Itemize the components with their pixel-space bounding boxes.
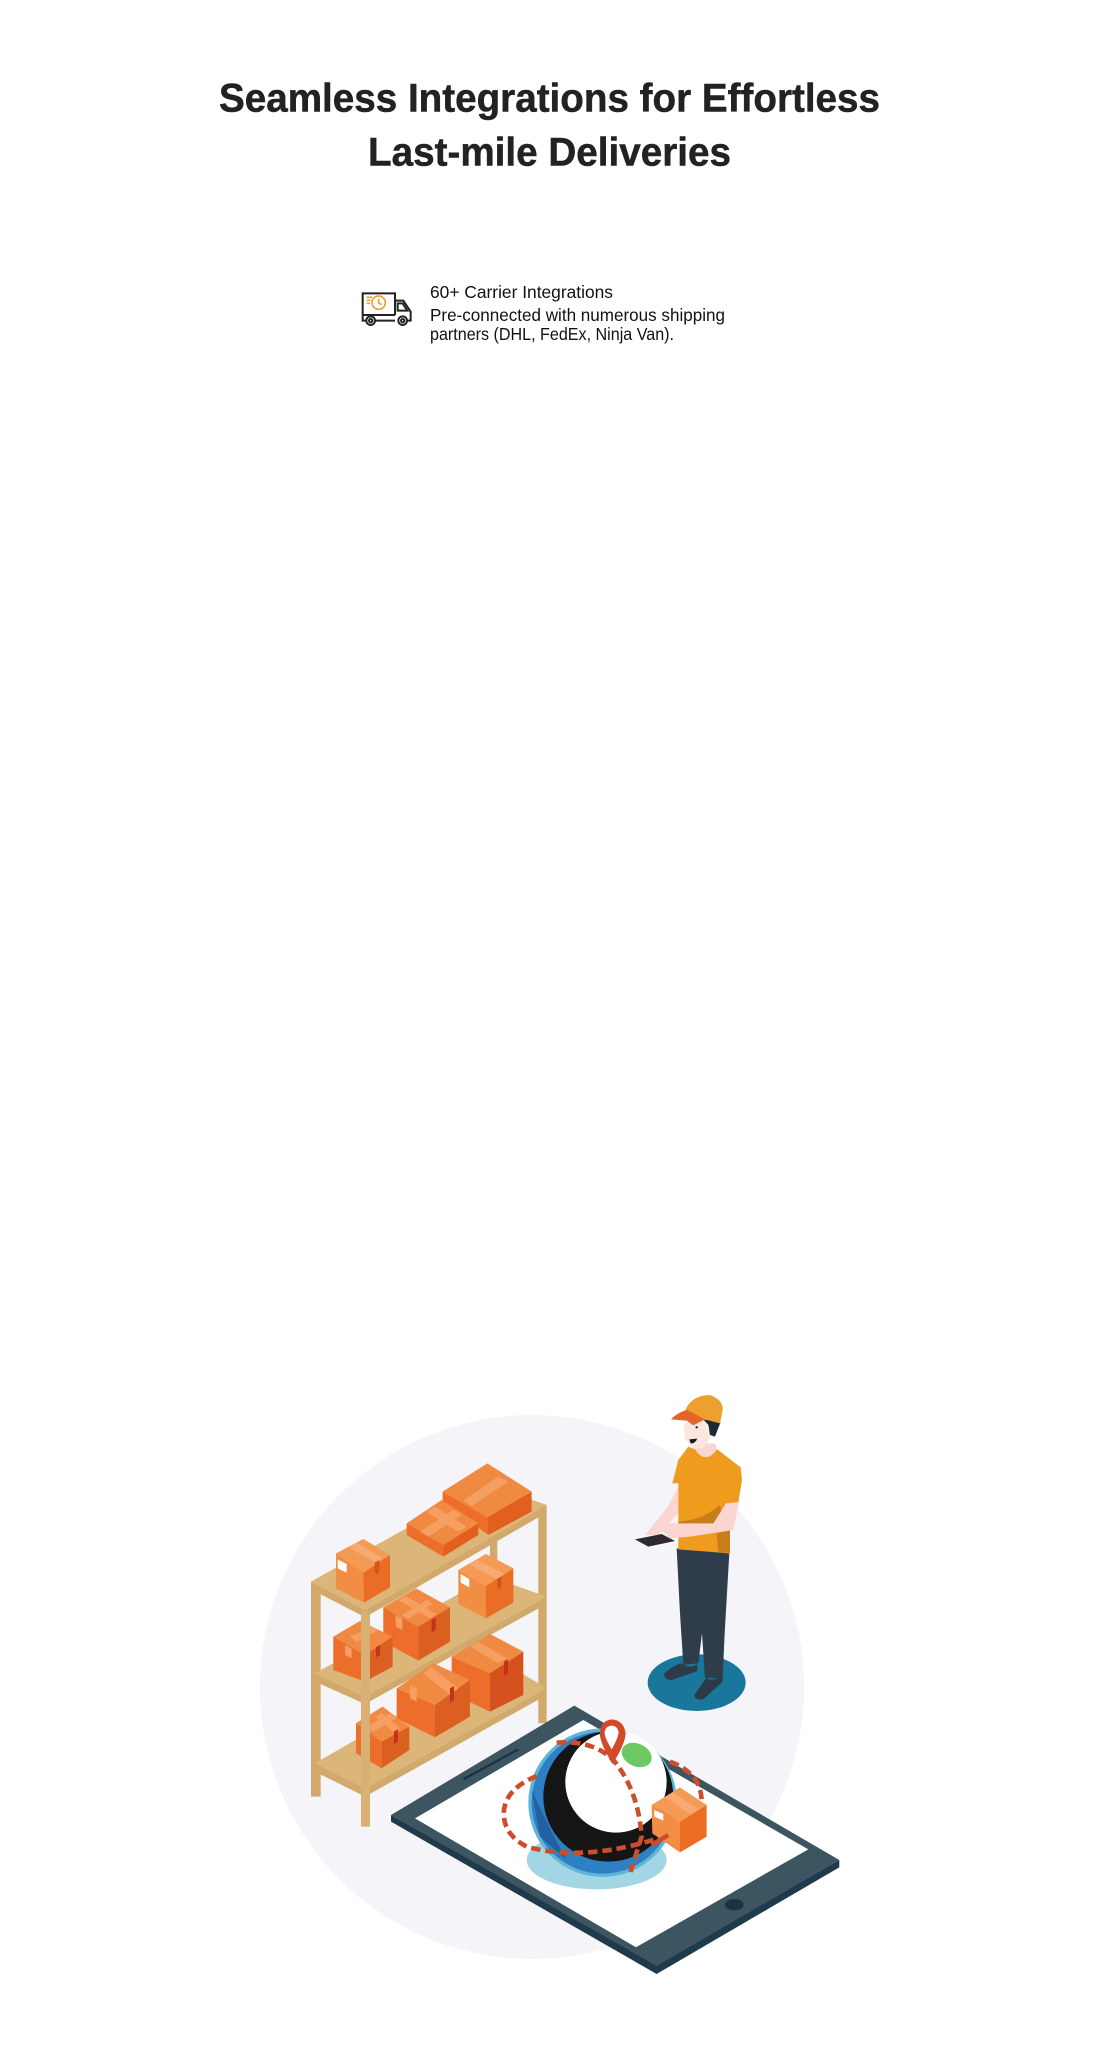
text block: carrier integrations: 60+ Carrier Integrations (430, 282, 613, 302)
left post (311, 1583, 321, 1797)
shoes (664, 1663, 723, 1700)
near arm (660, 1502, 739, 1538)
title: Seamless Integrations for Effortless (219, 76, 880, 120)
title: Last-mile Deliveries (368, 130, 731, 174)
globe shadow (527, 1831, 667, 1889)
box (356, 1707, 409, 1768)
parcel box (652, 1787, 707, 1852)
middle shelf (315, 1577, 547, 1704)
box (333, 1621, 393, 1682)
tablet side (391, 1815, 839, 1974)
face (684, 1419, 711, 1448)
tablet face (391, 1706, 839, 1966)
far arm (645, 1487, 678, 1535)
screen (415, 1720, 808, 1947)
box (407, 1500, 478, 1557)
mouth (689, 1439, 697, 1443)
front post (361, 1612, 370, 1827)
illustration: tablet with globe (391, 1706, 839, 1974)
background circle (260, 1415, 804, 1959)
text block: carrier integrations (430, 282, 725, 344)
box with label (458, 1554, 513, 1618)
back post (490, 1537, 497, 1560)
location pin (600, 1719, 626, 1764)
speaker (463, 1749, 518, 1779)
box (397, 1663, 470, 1737)
clipboard (635, 1534, 675, 1547)
cap (685, 1395, 723, 1423)
top shelf (311, 1483, 547, 1617)
bottom shelf (315, 1658, 547, 1797)
illustration: delivery person (635, 1395, 746, 1711)
neck (693, 1443, 718, 1460)
globe (528, 1728, 677, 1877)
illustration: warehouse shelf with boxes (311, 1463, 547, 1827)
box (383, 1588, 450, 1661)
shirt shadow (678, 1505, 730, 1553)
title (219, 76, 880, 174)
pants (677, 1548, 729, 1678)
text block: carrier integrations: Pre-connected with numerous shipping (430, 305, 725, 325)
home button (725, 1899, 744, 1910)
standing disc (648, 1654, 746, 1711)
box (443, 1463, 532, 1535)
hair (703, 1419, 721, 1437)
text block: carrier integrations: partners (DHL, FedEx, Ninja Van). (430, 324, 674, 344)
eye (695, 1426, 698, 1428)
right post (538, 1507, 547, 1723)
cap visor (671, 1410, 705, 1425)
dashed routes (504, 1742, 702, 1873)
icon: delivery truck (363, 293, 411, 325)
box with label (336, 1539, 390, 1603)
box (452, 1634, 523, 1712)
shirt (672, 1447, 742, 1553)
